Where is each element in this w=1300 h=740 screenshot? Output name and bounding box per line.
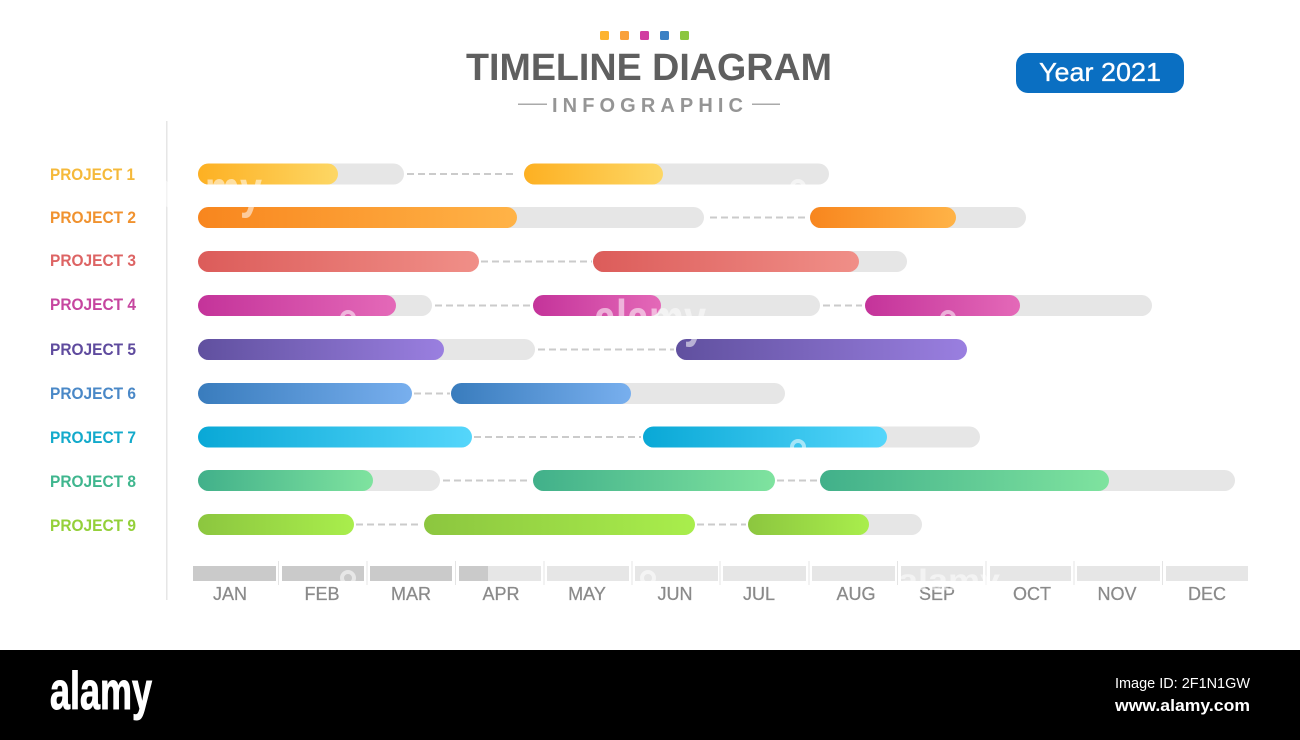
bar: project 5 second: [676, 339, 967, 360]
month labels: SEP: [919, 584, 955, 604]
row: project 2: [50, 207, 1026, 228]
row: project 5: [50, 339, 967, 360]
label: project 8: PROJECT 8: [50, 472, 136, 491]
footer logo: alamy: [50, 662, 152, 721]
bar: project 3 second: [593, 251, 907, 272]
month labels: JUN: [658, 584, 692, 604]
label: project 9: PROJECT 9: [50, 516, 136, 535]
bar: project 6 second: [451, 383, 785, 404]
bar: project 5 first: [198, 339, 535, 360]
month labels: JUL: [743, 584, 775, 604]
month labels: NOV: [1097, 584, 1137, 604]
row: project 9: [50, 514, 922, 535]
bar: project 7 second: [643, 426, 980, 448]
month labels: AUG: [836, 584, 876, 604]
month labels: APR: [482, 584, 520, 604]
footer band: [0, 650, 1300, 740]
label: project 1: PROJECT 1: [50, 165, 135, 184]
bar: project 9 second: [424, 514, 695, 535]
colour squares: [600, 31, 689, 40]
month labels: [213, 584, 1226, 604]
row: project 1: [50, 164, 829, 184]
bar: project 9 first: [198, 514, 354, 535]
watermark overlay: [150, 161, 1000, 597]
year badge: [1016, 53, 1184, 93]
month labels: DEC: [1188, 584, 1226, 604]
bar: project 2 first: [198, 207, 704, 228]
bar: project 4 second: [533, 295, 820, 316]
bar: project 8 second: [533, 470, 775, 491]
label: project 4: PROJECT 4: [50, 295, 136, 314]
bar: project 6 first: [198, 383, 412, 404]
month labels: FEB: [304, 584, 340, 604]
bar: project 4 third: [865, 295, 1152, 316]
bar: project 2 second: [810, 207, 1026, 228]
bar: project 4 first: [198, 295, 432, 316]
bar: project 8 first: [198, 470, 440, 491]
bar: project 7 first: [198, 426, 472, 448]
month progress strip: [193, 561, 1248, 585]
watermark overlay: alamy: [898, 564, 1000, 597]
row: project 6: [50, 383, 785, 404]
label: project 6: PROJECT 6: [50, 384, 136, 403]
row: project 8: [50, 470, 1235, 491]
footer image id: Image ID: 2F1N1GW: [1115, 675, 1251, 692]
label: project 5: PROJECT 5: [50, 340, 136, 359]
watermark overlay: alamy: [594, 290, 706, 348]
label: project 2: PROJECT 2: [50, 208, 136, 227]
row: project 3: [50, 251, 907, 272]
bar: project 1 first: [198, 164, 404, 184]
footer url: www.alamy.com: [1114, 696, 1250, 715]
bar: project 9 third: [748, 514, 922, 535]
month labels: MAR: [391, 584, 431, 604]
axis line: [166, 121, 168, 600]
bar: project 1 second: [524, 164, 829, 184]
bar: project 3 first: [198, 251, 479, 272]
month labels: MAY: [568, 584, 606, 604]
subtitle: INFOGRAPHIC: [552, 95, 743, 117]
label: project 7: PROJECT 7: [50, 428, 136, 447]
month labels: OCT: [1013, 584, 1051, 604]
year badge: Year 2021: [1039, 57, 1161, 87]
month labels: JAN: [213, 584, 247, 604]
label: project 3: PROJECT 3: [50, 251, 136, 270]
row: project 7: [50, 426, 980, 448]
title: TIMELINE DIAGRAM: [466, 47, 832, 89]
row: project 4: [50, 295, 1152, 316]
watermark overlay: alamy: [150, 161, 262, 219]
bar: project 8 third: [820, 470, 1235, 491]
